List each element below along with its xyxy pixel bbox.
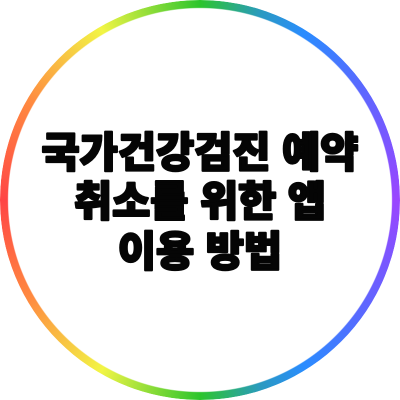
title: 국가건강검진 예약 — [42, 129, 358, 176]
title: 이용 방법 — [118, 228, 282, 275]
title: 취소를 위한 앱 — [74, 178, 326, 225]
